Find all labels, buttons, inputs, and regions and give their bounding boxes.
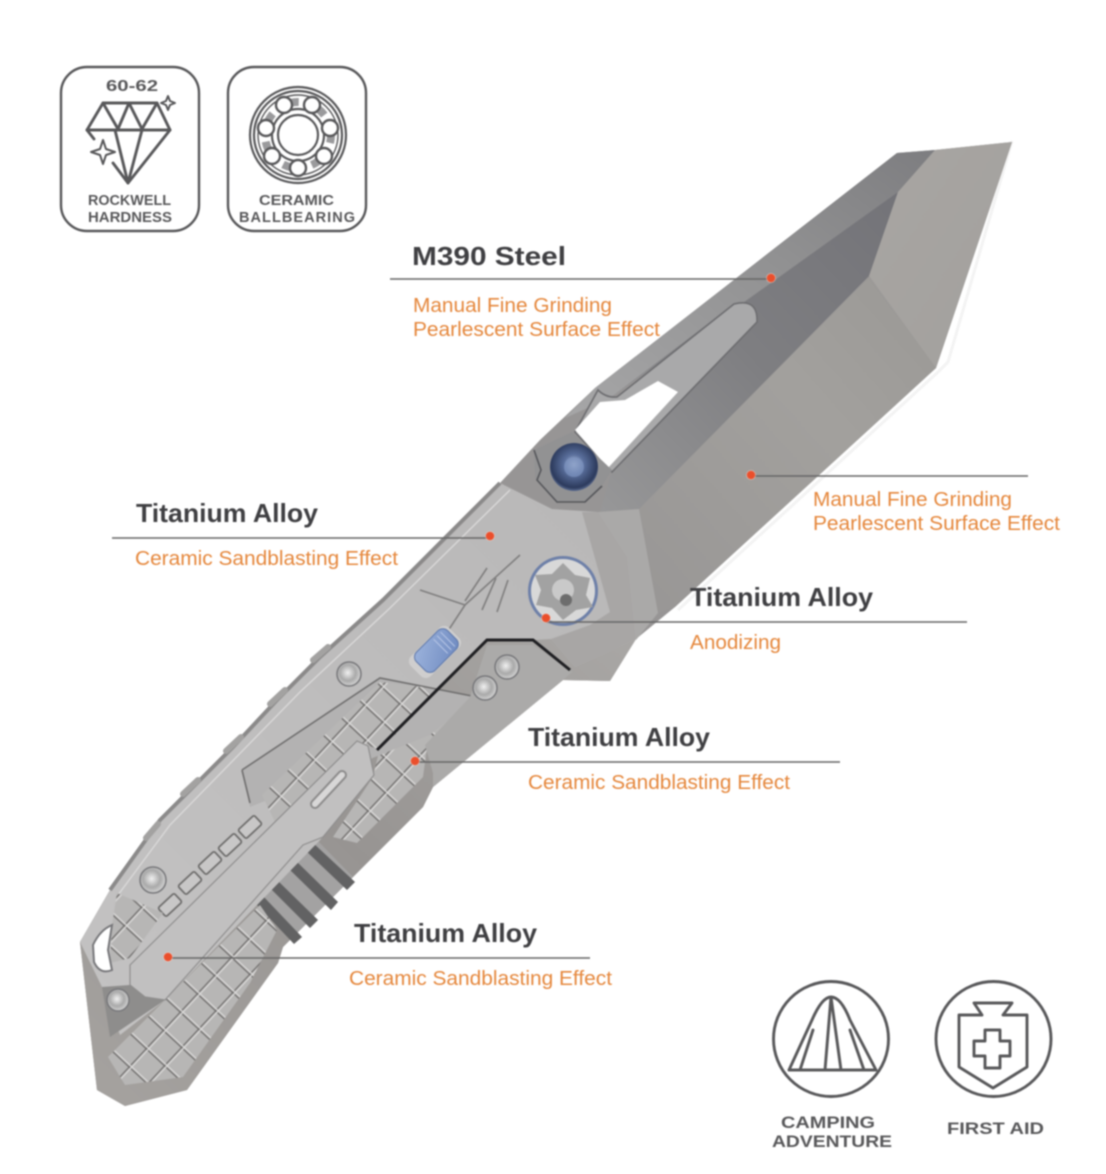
badge caption: CERAMIC <box>259 193 335 209</box>
badge caption: HARDNESS <box>88 210 172 226</box>
callout: titanium handle: Titanium Alloy <box>528 722 711 752</box>
lockbar <box>425 645 572 787</box>
callout: titanium frame <box>112 498 494 570</box>
hardness value: 60-62 <box>106 78 158 95</box>
lanyard hole <box>93 925 112 971</box>
thumb stud <box>406 623 464 681</box>
upper grip band <box>158 678 477 917</box>
callout: blade surface <box>746 470 1060 535</box>
stop pin <box>550 443 598 491</box>
butt grip pads <box>110 893 163 963</box>
icon: diamond <box>87 96 175 183</box>
caption: first aid: FIRST AID <box>947 1120 1044 1138</box>
callout: M390 steel <box>390 241 776 341</box>
spacers <box>257 840 355 944</box>
frame highlight <box>118 490 510 895</box>
badge: rockwell hardness <box>61 67 199 231</box>
badge: ceramic ballbearing <box>228 67 366 231</box>
blade spine bevel <box>565 150 935 418</box>
icon: first aid shield <box>936 982 1051 1096</box>
callout: M390 steel: Pearlescent Surface Effect <box>413 319 660 341</box>
thumb hole <box>575 381 678 468</box>
pocket clip <box>102 741 374 1037</box>
callout: titanium frame: Ceramic Sandblasting Effect <box>135 548 398 570</box>
knife illustration <box>80 141 1012 1106</box>
icon: ball bearing <box>250 87 346 183</box>
callout: titanium handle <box>410 722 840 794</box>
ricasso <box>598 509 658 640</box>
callout: anodized pivot: Titanium Alloy <box>690 582 874 612</box>
screws <box>107 655 519 1011</box>
caption: camping adventure: ADVENTURE <box>772 1133 892 1151</box>
callout: blade surface: Manual Fine Grinding <box>813 489 1012 511</box>
middle grip pads <box>333 687 470 843</box>
thumb slot <box>575 303 757 472</box>
main pivot <box>528 556 598 626</box>
callout: titanium clip: Titanium Alloy <box>354 918 538 948</box>
lower grip pads <box>108 905 277 1085</box>
frame top bevel <box>110 483 500 890</box>
handle upper frame <box>80 483 636 1035</box>
callout: anodized pivot <box>542 582 967 654</box>
knife silhouette base <box>80 142 1012 1106</box>
pivot facet <box>551 512 636 667</box>
stop pin collar <box>534 432 612 502</box>
callout: titanium clip: Ceramic Sandblasting Effect <box>349 968 612 990</box>
logo lines <box>420 555 520 640</box>
black liner gap <box>377 640 570 750</box>
badge caption: BALLBEARING <box>239 210 355 226</box>
callout: titanium clip <box>164 918 612 990</box>
callout: titanium frame: Titanium Alloy <box>136 498 319 528</box>
icon: camping tent <box>774 982 888 1096</box>
edge bumps <box>146 647 328 838</box>
callout: M390 steel: Manual Fine Grinding <box>413 295 612 317</box>
edge highlight <box>678 141 1012 610</box>
caption: camping adventure: CAMPING <box>781 1114 875 1132</box>
callout: M390 steel: M390 Steel <box>412 241 566 271</box>
callout: blade surface: Pearlescent Surface Effect <box>813 513 1060 535</box>
handle back scale <box>80 600 636 1106</box>
callout: anodized pivot: Anodizing <box>690 632 781 654</box>
blade tip face <box>869 142 1012 368</box>
blade <box>534 142 1012 640</box>
blade hollow grind <box>600 192 898 512</box>
blade main grind face <box>639 277 936 613</box>
badge caption: ROCKWELL <box>88 193 171 209</box>
callout: titanium handle: Ceramic Sandblasting Effect <box>528 772 790 794</box>
clip slot <box>315 775 342 804</box>
